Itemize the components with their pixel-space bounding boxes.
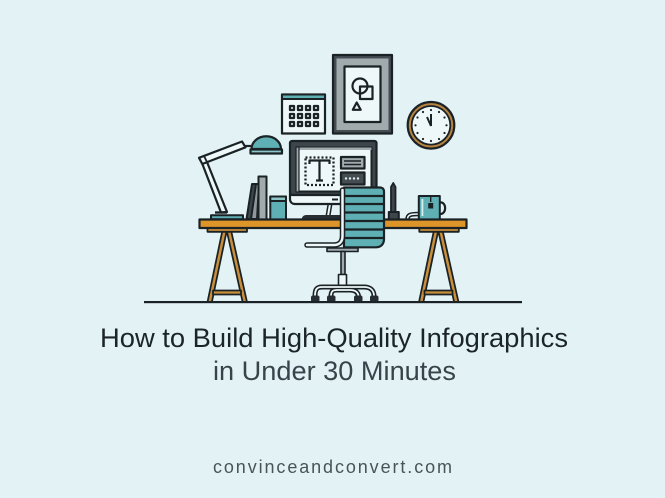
title: How to Build High-Quality Infographics	[100, 323, 568, 353]
desk right trestle leg	[421, 231, 456, 302]
website url: convinceandconvert.com	[213, 457, 452, 477]
chair base and wheels	[311, 287, 378, 302]
subtitle: in Under 30 Minutes	[213, 356, 456, 386]
chair frame arm	[307, 190, 342, 245]
desk plates	[208, 228, 459, 232]
icon: office chair	[307, 188, 384, 302]
ground line	[144, 301, 522, 303]
chair post	[338, 252, 346, 286]
desk left trestle leg	[210, 231, 245, 302]
icon: teal cup	[270, 196, 286, 220]
icon: wall clock	[408, 102, 454, 149]
icon: computer monitor	[290, 141, 376, 220]
icon: coffee mug with tea bag	[408, 196, 445, 220]
chair back	[344, 188, 384, 247]
icon: desk lamp	[199, 136, 282, 219]
icon: framed picture	[333, 55, 392, 134]
chair seat plate	[327, 248, 358, 252]
desk	[200, 220, 466, 302]
icon: books	[246, 176, 266, 220]
icon: wall calendar	[282, 94, 325, 134]
desk top	[200, 220, 466, 228]
icon: pen holder	[389, 183, 399, 220]
illustration: desk scene	[144, 55, 522, 303]
